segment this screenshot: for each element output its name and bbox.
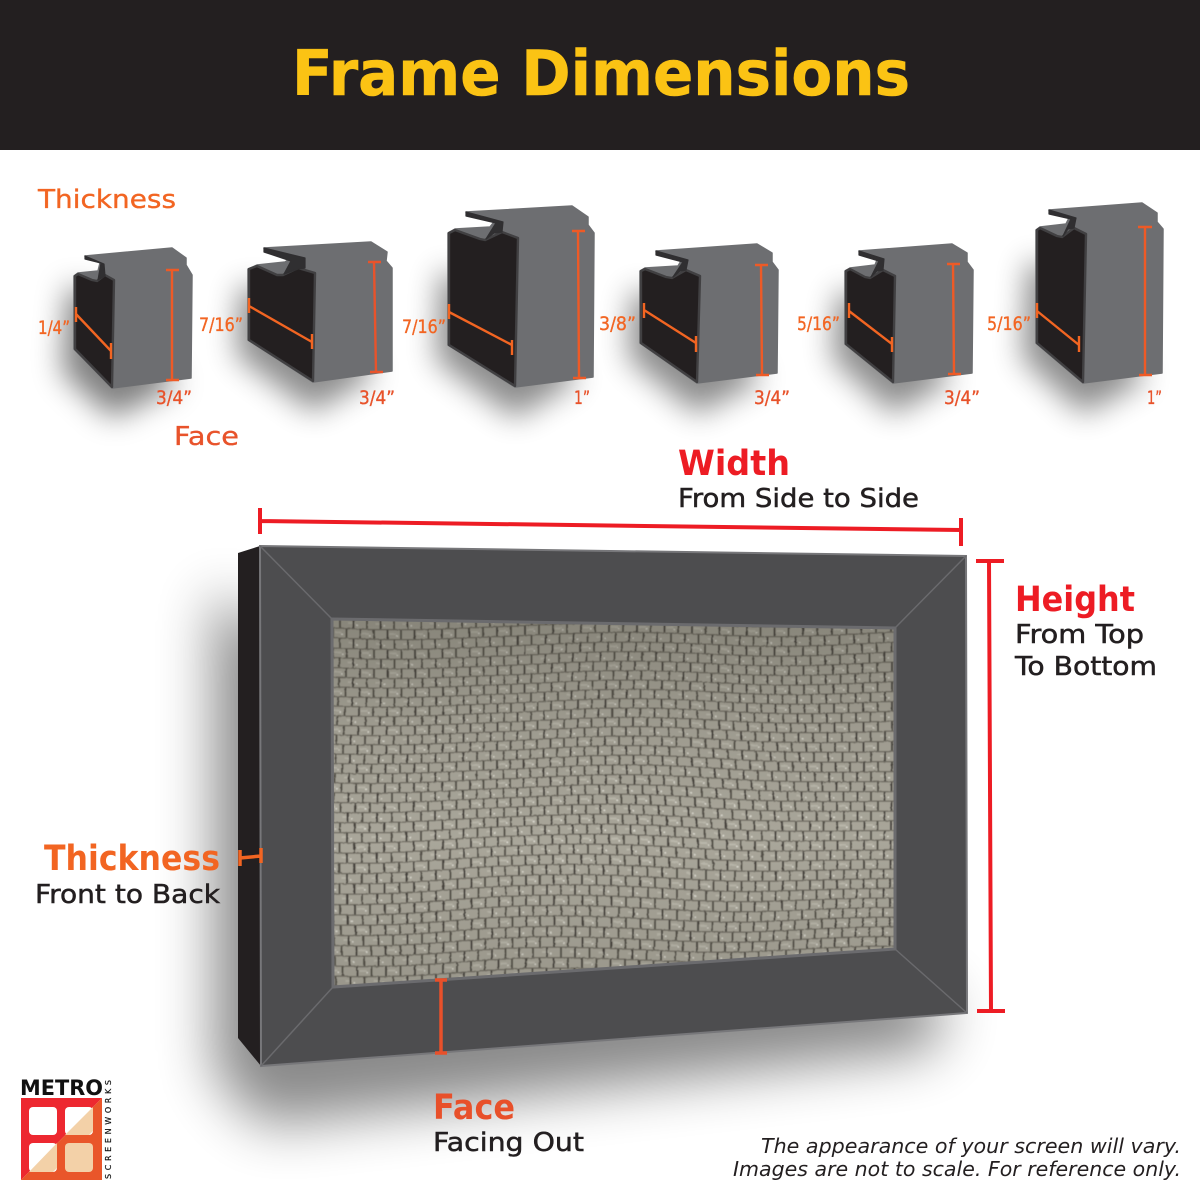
height label: Height (1015, 580, 1135, 620)
profile 3: 7/16 by 1: 1” (574, 388, 590, 409)
main frame illustration (214, 546, 967, 1125)
heading: thickness: Thickness (37, 185, 176, 215)
disclaimer note: Images are not to scale. For reference only. (733, 1157, 1181, 1181)
face dimension (435, 980, 447, 1053)
profile 5: 5/16 by 3/4: 5/16” (797, 314, 840, 335)
profile 1: 1/4 by 3/4: 3/4” (156, 388, 192, 409)
profile 6: 5/16 by 1 (987, 203, 1163, 414)
profile 5: 5/16 by 3/4 (797, 244, 980, 414)
profile 6: 5/16 by 1: 1” (1147, 388, 1162, 409)
width dimension (260, 508, 961, 546)
title: Frame Dimensions (292, 37, 910, 110)
screen mesh (330, 618, 896, 988)
width label (678, 444, 919, 514)
profile 1: 1/4 by 3/4 (38, 248, 192, 418)
disclaimer note: The appearance of your screen will vary. (761, 1134, 1181, 1158)
heading: face: Face (174, 422, 239, 452)
frame side (238, 546, 261, 1066)
width label: From Side to Side (678, 484, 919, 514)
logo: Metro Screenworks (20, 1076, 113, 1180)
profile 3: 7/16 by 1: 7/16” (402, 317, 446, 338)
profile 2: 7/16 by 3/4: 3/4” (359, 388, 395, 409)
title banner (0, 0, 1200, 150)
thickness dimension (240, 848, 261, 866)
face label: Face (433, 1088, 515, 1128)
logo: Metro Screenworks: SCREENWORKS (104, 1080, 113, 1179)
profile 4: 3/8 by 3/4 (599, 244, 790, 414)
logo: Metro Screenworks: METRO (20, 1076, 103, 1100)
width label: Width (678, 444, 790, 484)
profile 2: 7/16 by 3/4: 7/16” (199, 315, 243, 336)
profile 4: 3/8 by 3/4: 3/4” (754, 388, 790, 409)
profile 3: 7/16 by 1 (402, 206, 594, 418)
thickness label: Thickness (44, 839, 220, 879)
height label: From Top (1015, 620, 1144, 650)
face label (433, 1088, 584, 1158)
profile 1: 1/4 by 3/4: 1/4” (38, 318, 70, 339)
height dimension (976, 561, 1005, 1011)
face label: Facing Out (433, 1128, 584, 1158)
profile 2: 7/16 by 3/4 (199, 242, 395, 412)
profile 5: 5/16 by 3/4: 3/4” (944, 388, 980, 409)
frame front (260, 546, 967, 1066)
profile 4: 3/8 by 3/4: 3/8” (599, 314, 636, 335)
height label (1014, 580, 1157, 682)
profile 6: 5/16 by 1: 5/16” (987, 314, 1031, 335)
thickness label (35, 839, 220, 910)
thickness label: Front to Back (35, 880, 220, 910)
disclaimer note (733, 1134, 1181, 1181)
height label: To Bottom (1014, 652, 1157, 682)
